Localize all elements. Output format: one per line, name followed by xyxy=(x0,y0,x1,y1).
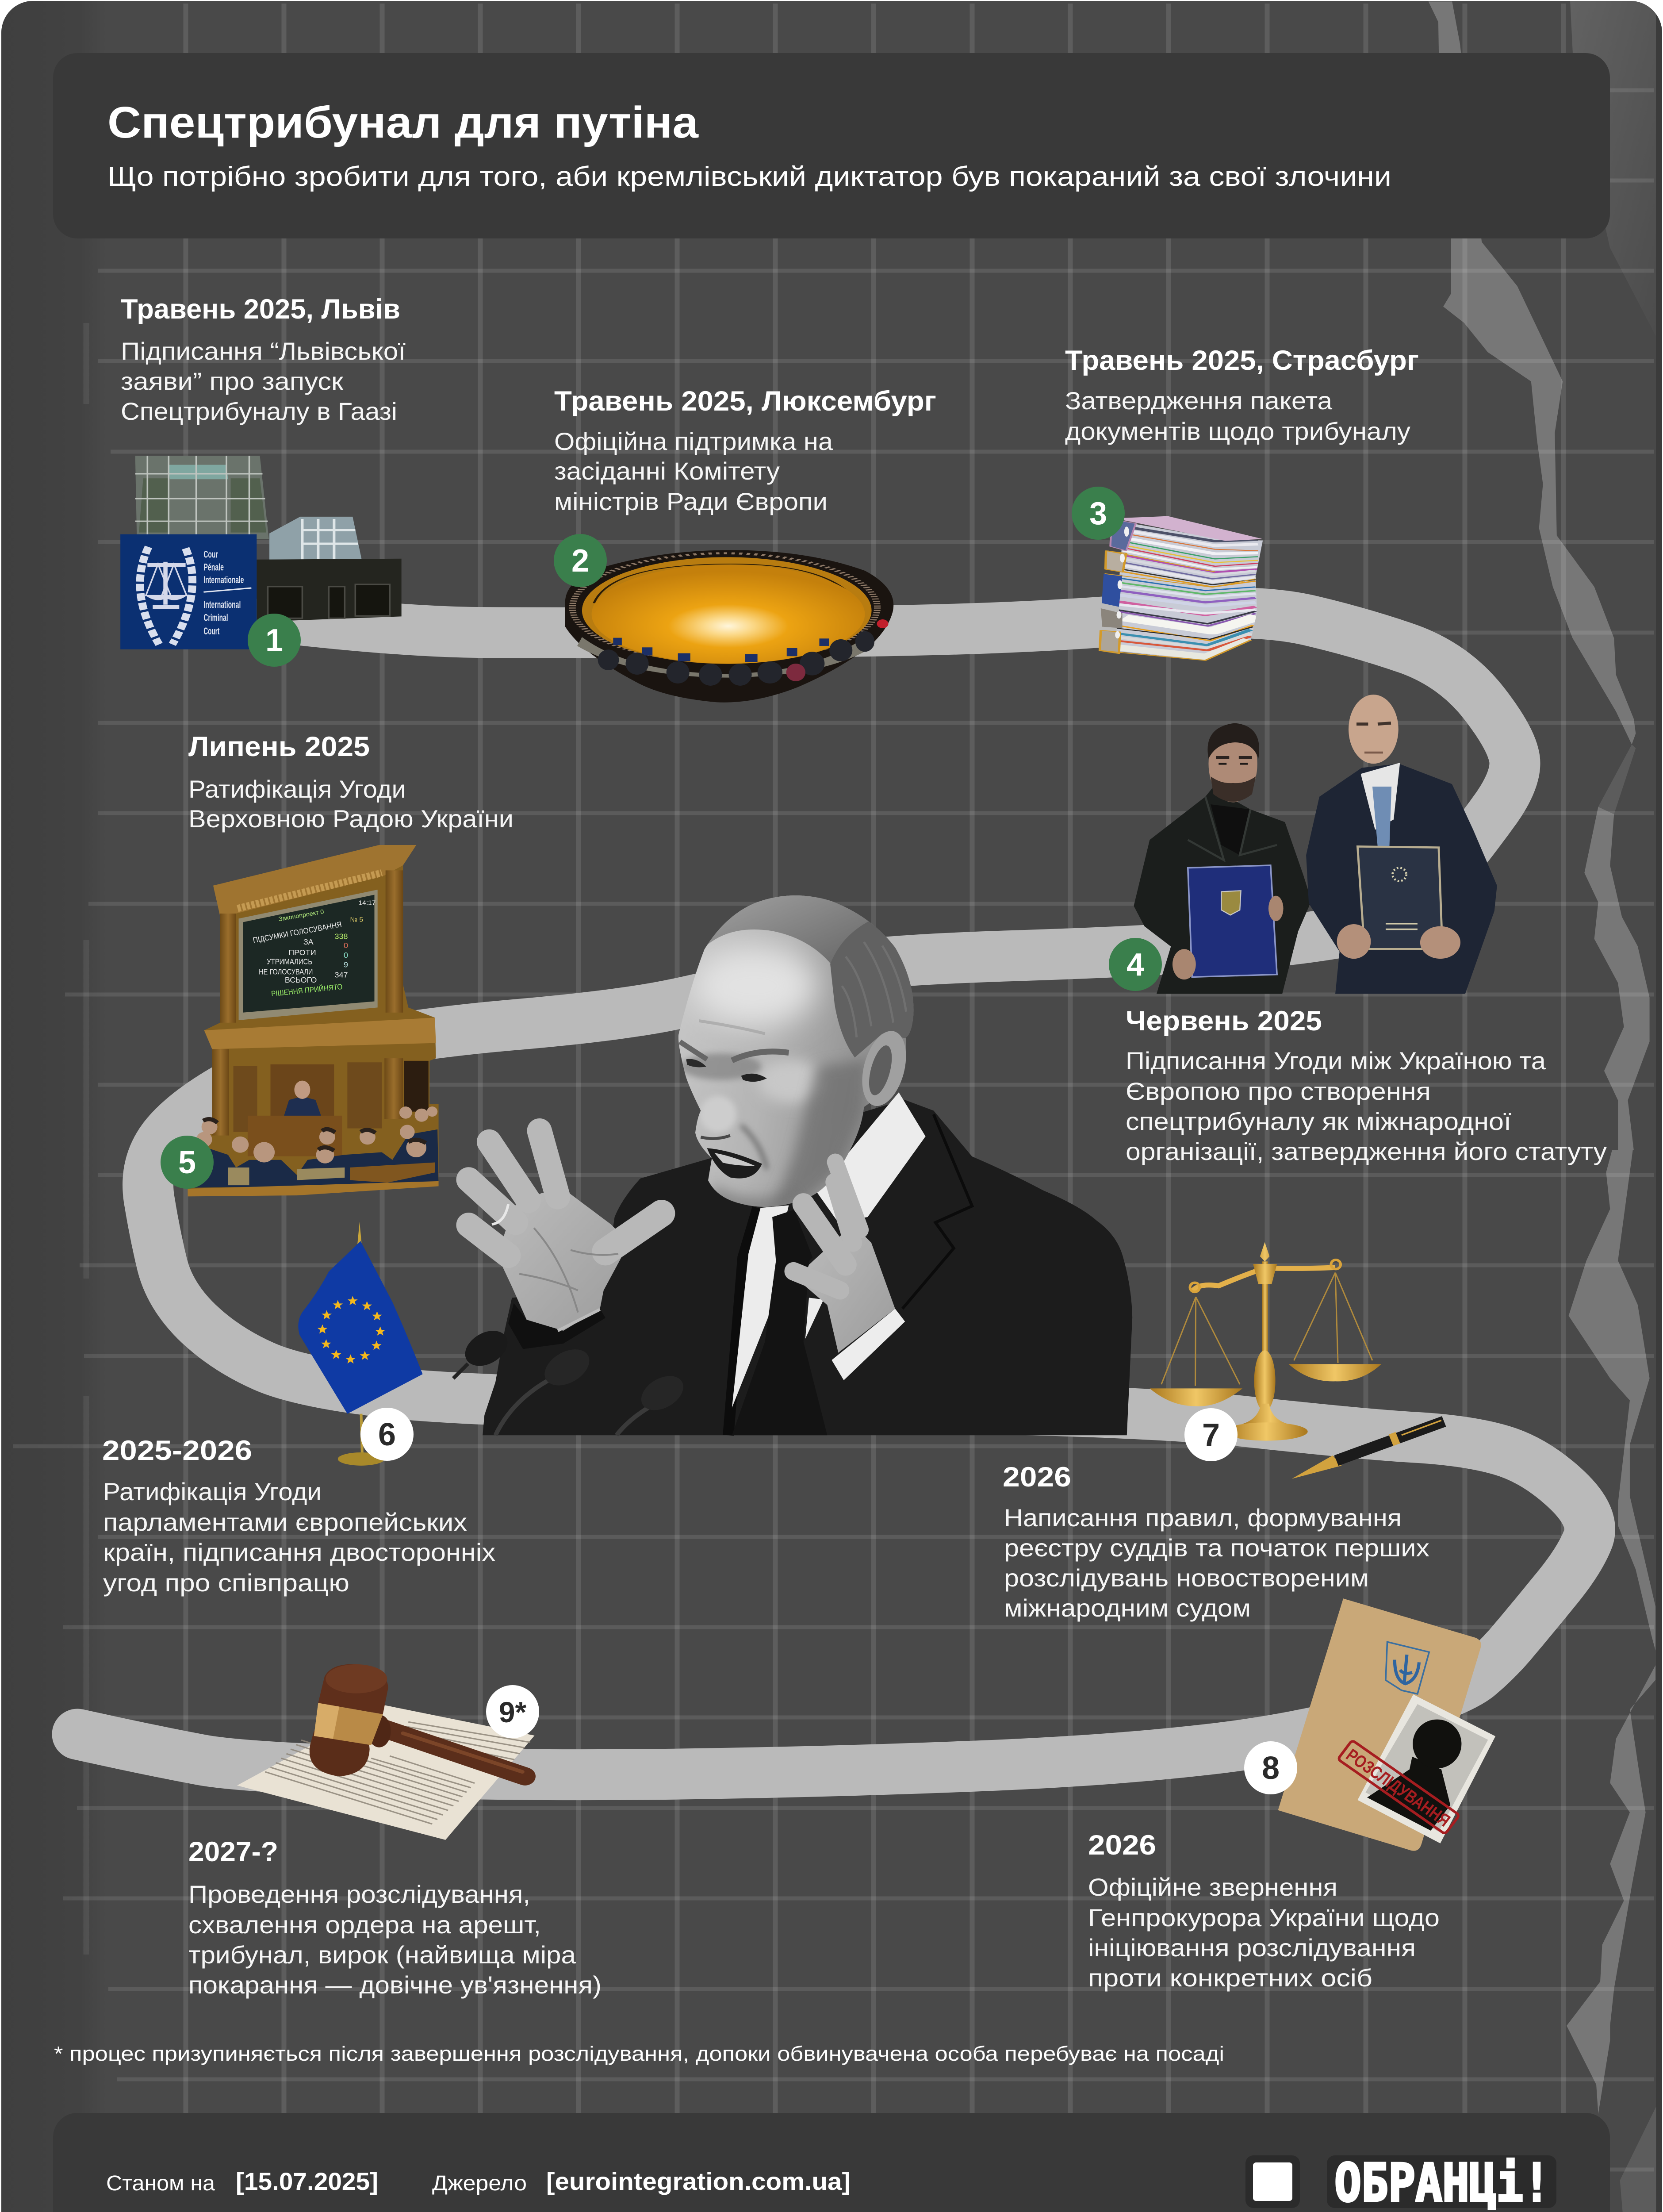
voting screen: ПІДСУМКИ ГОЛОСУВАННЯ xyxy=(252,920,342,945)
subtitle: Що потрібно зробити для того, аби кремлівський диктатор був покараний за свої злочини xyxy=(107,161,1391,192)
step 5 text: Липень 2025 xyxy=(188,731,370,762)
step 6 text xyxy=(102,1435,495,1597)
step 9 text xyxy=(188,1836,602,1999)
binder spines xyxy=(1100,519,1256,661)
voting screen: ЗА xyxy=(303,937,314,946)
image: golden scales and fountain pen xyxy=(1150,1242,1444,1479)
lower head xyxy=(310,1731,370,1776)
mouth xyxy=(707,1148,762,1179)
step 3 text: документів щодо трибуналу xyxy=(1065,417,1410,445)
step 9 text: 2027-? xyxy=(188,1836,278,1867)
marker 9 xyxy=(486,1685,539,1738)
step 7 text: 2026 xyxy=(1003,1462,1071,1493)
logo panel xyxy=(120,534,257,649)
marker 7 xyxy=(1184,1408,1238,1461)
step 4 text: спецтрибуналу як міжнародної xyxy=(1126,1107,1511,1135)
step 6 text: країн, підписання двосторонніх xyxy=(103,1538,495,1566)
marker 8: 8 xyxy=(1262,1751,1280,1786)
step 7 text: міжнародним судом xyxy=(1004,1594,1251,1622)
handle xyxy=(382,1728,525,1776)
microphones xyxy=(453,1324,689,1435)
marker 9: 9* xyxy=(499,1696,527,1728)
voting screen: РІШЕННЯ ПРИЙНЯТО xyxy=(271,982,343,998)
voting screen: Законопроект 0 xyxy=(278,908,325,922)
right hand xyxy=(793,1162,905,1380)
step 6 text: Ратифікація Угоди xyxy=(103,1478,322,1505)
upper head xyxy=(318,1664,388,1714)
image: Putin, black and white cutout xyxy=(453,876,1132,1435)
crown hair xyxy=(699,883,882,964)
tie xyxy=(732,1210,827,1435)
cheek light xyxy=(758,1059,824,1103)
step 4 text: організації, затвердження його статуту xyxy=(1126,1137,1607,1165)
footer panel xyxy=(53,2113,1610,2212)
step 1 text: Підписання “Львівської xyxy=(121,337,406,365)
marker 2: 2 xyxy=(571,543,589,579)
voting screen: № 5 xyxy=(350,916,363,923)
image: parliament rostrum with voting screen xyxy=(188,845,439,1196)
marker 7: 7 xyxy=(1202,1417,1220,1453)
step 6 text: 2025-2026 xyxy=(102,1435,252,1466)
step 4 text xyxy=(1126,1006,1607,1165)
voting screen xyxy=(239,890,378,1020)
step 4 text: Червень 2025 xyxy=(1126,1006,1322,1037)
step 2 text: Травень 2025, Люксембург xyxy=(554,386,936,417)
image: case folder with photo and stamp xyxy=(1278,1598,1495,1851)
step markers xyxy=(161,487,1297,1794)
band xyxy=(314,1703,383,1745)
speaker at rostrum xyxy=(248,1081,342,1156)
image: round table of the committee of ministers xyxy=(565,550,893,703)
image: Zelensky and Berset with documents xyxy=(1134,695,1497,994)
logo panel: International xyxy=(203,599,241,610)
marker 5 xyxy=(161,1136,214,1189)
voting screen: 14:17 xyxy=(359,899,376,906)
pen xyxy=(1292,1421,1444,1479)
header panel xyxy=(53,53,1610,238)
footnote: * процес призупиняється після завершення розслідування, допоки обвинувачена особа перебуває на посаді xyxy=(54,2042,1224,2065)
marker 1 xyxy=(248,614,301,667)
step 2 text xyxy=(554,386,936,515)
image: stack of binders xyxy=(1100,516,1263,661)
ear xyxy=(854,1026,914,1111)
step 6 text: парламентами європейських xyxy=(103,1508,467,1536)
seated delegates xyxy=(577,619,889,686)
step 8 text: проти конкретних осіб xyxy=(1088,1964,1372,1992)
deputies xyxy=(188,1106,439,1196)
marker 6 xyxy=(360,1408,414,1461)
marker 5: 5 xyxy=(178,1145,196,1180)
voting screen: УТРИМАЛИСЬ xyxy=(267,957,312,966)
step 7 text: розслідувань новоствореним xyxy=(1004,1564,1369,1592)
Berset xyxy=(1306,695,1497,994)
marker 1: 1 xyxy=(265,623,283,658)
Zelensky xyxy=(1134,723,1311,994)
stamp xyxy=(1338,1740,1460,1834)
step 3 text: Затвердження пакета xyxy=(1065,387,1333,415)
step 9 text: трибунал, вирок (найвища міра xyxy=(188,1941,576,1969)
voting screen: 338 xyxy=(335,932,348,941)
step 6 text: угод про співпрацю xyxy=(103,1569,349,1597)
logo: ОБРАНЦі! xyxy=(1334,2152,1550,2212)
step 7 text: Написання правил, формування xyxy=(1004,1504,1402,1532)
logo panel: Cour xyxy=(203,549,218,560)
marker 6: 6 xyxy=(378,1417,396,1452)
step 2 text: Офіційна підтримка на xyxy=(554,427,833,455)
step 9 text: Проведення розслідування, xyxy=(188,1880,530,1908)
page mass xyxy=(1114,522,1263,661)
step 7 text: реєстру суддів та початок перших xyxy=(1004,1534,1429,1562)
step 8 text: Генпрокурора України щодо xyxy=(1088,1904,1440,1932)
torn paper strip, lower xyxy=(1567,1150,1656,2212)
step 8 text: ініціювання розслідування xyxy=(1088,1934,1416,1962)
dark base xyxy=(257,559,402,622)
step 1 text: заяви” про запуск xyxy=(121,367,344,395)
marker 3: 3 xyxy=(1089,496,1107,531)
nose xyxy=(700,1096,736,1133)
image: gavel on a document xyxy=(237,1664,535,1840)
marker 8 xyxy=(1244,1741,1297,1794)
nasolabial fold xyxy=(741,1125,767,1169)
step 2 text: міністрів Ради Європи xyxy=(554,488,828,515)
step 4 text: Європою про створення xyxy=(1126,1077,1431,1105)
step 1 text: Травень 2025, Львів xyxy=(121,294,400,325)
logo panel: Pénale xyxy=(203,562,224,573)
step 5 text: Верховною Радою України xyxy=(188,805,513,833)
voting screen: ПРОТИ xyxy=(288,948,316,957)
jaw shadow xyxy=(772,1059,868,1210)
date label: Станом на xyxy=(106,2172,215,2195)
source value: [eurointegration.com.ua] xyxy=(546,2167,851,2195)
step 9 text: схвалення ордера на арешт, xyxy=(188,1911,541,1939)
voting screen: 0 xyxy=(344,951,348,960)
step 9 text: покарання — довічне ув'язнення) xyxy=(188,1971,602,1999)
suit xyxy=(483,1100,1132,1435)
source label: Джерело xyxy=(432,2172,527,2195)
logo panel: Internationale xyxy=(203,575,244,585)
date value: [15.07.2025] xyxy=(236,2167,378,2195)
brow shadow xyxy=(681,1053,761,1080)
head xyxy=(662,876,926,1225)
torn paper strip, upper xyxy=(1429,1,1650,1150)
step 7 text xyxy=(1003,1462,1429,1622)
step 5 text xyxy=(188,731,513,833)
step 3 text: Травень 2025, Страсбург xyxy=(1065,345,1419,376)
pink top cover xyxy=(1114,516,1263,541)
logo panel: Court xyxy=(203,626,219,637)
marker 3 xyxy=(1072,487,1125,540)
marker 2 xyxy=(554,534,607,587)
step 8 text xyxy=(1088,1830,1440,1992)
step 1 text xyxy=(121,294,406,425)
forehead light xyxy=(692,946,816,1026)
logo xyxy=(1245,2152,1556,2212)
shirt xyxy=(732,1092,926,1408)
tower xyxy=(269,517,362,562)
voting screen: ВСЬОГО xyxy=(285,975,317,984)
voting screen: 347 xyxy=(335,971,348,979)
step 1 text: Спецтрибуналу в Гаазі xyxy=(121,397,397,425)
step 8 text: 2026 xyxy=(1088,1830,1156,1861)
left hand xyxy=(469,1131,662,1349)
stamp: РОЗСЛІДУВАННЯ xyxy=(1342,1745,1454,1831)
marker 4: 4 xyxy=(1127,947,1144,983)
step 2 text: засіданні Комітету xyxy=(554,457,780,485)
image: international criminal court building and logo xyxy=(120,456,402,649)
marker 4 xyxy=(1109,938,1162,991)
voting screen: 9 xyxy=(344,960,348,969)
step 4 text: Підписання Угоди між Україною та xyxy=(1126,1047,1546,1075)
voting screen: 0 xyxy=(344,941,348,950)
step 5 text: Ратифікація Угоди xyxy=(188,775,406,803)
road path xyxy=(77,613,1590,1775)
step 3 text xyxy=(1065,345,1419,445)
image: EU table flag xyxy=(298,1222,423,1466)
logo panel: Criminal xyxy=(203,612,228,623)
title: Спецтрибунал для путіна xyxy=(107,98,699,147)
scales xyxy=(1150,1242,1381,1441)
glass building xyxy=(135,456,269,539)
voting screen: НЕ ГОЛОСУВАЛИ xyxy=(259,968,313,976)
step 8 text: Офіційне звернення xyxy=(1088,1873,1337,1901)
